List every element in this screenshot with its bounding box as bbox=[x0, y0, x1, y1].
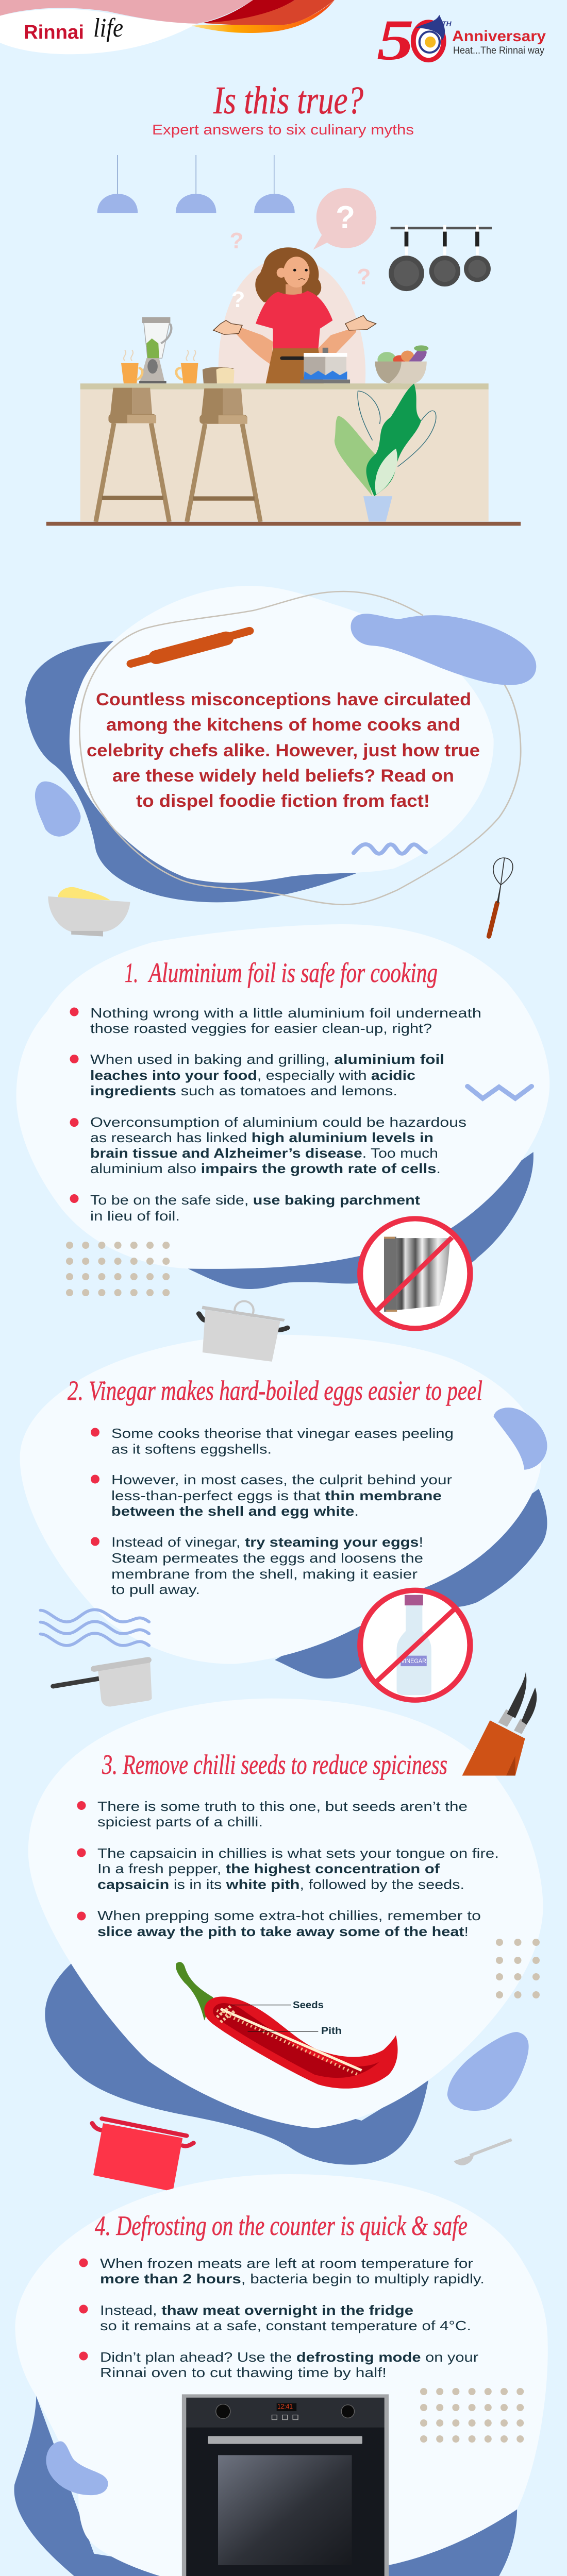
logo: Rinnai life: Rinnai bbox=[24, 22, 84, 43]
bullet 1.2: ingredients such as tomatoes and lemons. bbox=[90, 1083, 397, 1098]
bullet 2.2 bbox=[91, 1472, 452, 1519]
pan rack bbox=[389, 225, 492, 291]
logo: 50th anniversary: TH bbox=[442, 20, 452, 28]
bowl of vegetables bbox=[375, 345, 428, 383]
bullet 1.4: in lieu of foil. bbox=[90, 1208, 180, 1224]
logo: 50th anniversary: Heat...The Rinnai way bbox=[453, 45, 544, 56]
title: Is this true? bbox=[213, 79, 363, 122]
question marks: ? bbox=[336, 200, 355, 235]
oven bbox=[182, 2394, 389, 2576]
panel 4 blob shapes bbox=[14, 2174, 548, 2576]
logo: Rinnai life bbox=[24, 13, 123, 43]
bullet 2.2: between the shell and egg white . bbox=[111, 1503, 359, 1519]
bullet 2.3: Steam permeates the eggs and loosens the bbox=[111, 1550, 423, 1566]
bullet 3.2: The capsaicin in chillies is what sets your tongue on fire. bbox=[97, 1845, 499, 1861]
bread bbox=[203, 367, 235, 383]
illustration: kitchen scene bbox=[46, 155, 521, 526]
bullet 4.1: more than 2 hours , bacteria begin to multiply rapidly. bbox=[100, 2271, 485, 2286]
header wave bbox=[0, 0, 335, 54]
panel 3 blob shapes bbox=[28, 1699, 543, 2165]
mugs bbox=[121, 350, 198, 383]
bullet 1.2: leaches into your food , especially with acidic bbox=[90, 1067, 415, 1083]
chilli diagram: Pith bbox=[321, 2026, 342, 2037]
chilli diagram bbox=[176, 1962, 398, 2089]
bullet 1.3 bbox=[70, 1114, 466, 1176]
bullet 3.2: In a fresh pepper, the highest concentration of bbox=[97, 1861, 440, 1876]
bullet 4.1: When frozen meats are left at room temperature for bbox=[100, 2256, 473, 2271]
logo: 50th anniversary: Anniversary bbox=[452, 28, 546, 45]
icon: mixing bowl bbox=[48, 887, 130, 937]
icon: whisk bbox=[489, 858, 513, 937]
logo: 50th anniversary bbox=[377, 8, 546, 72]
intro text: celebrity chefs alike. However, just how true bbox=[87, 741, 480, 760]
counter and floor bbox=[46, 383, 521, 526]
bullet 4.1 bbox=[79, 2256, 485, 2286]
bullet 4.2 bbox=[79, 2302, 471, 2333]
decorative dots 4 bbox=[424, 2392, 522, 2439]
intro blob shapes bbox=[25, 586, 536, 905]
bullet 4.2: Instead, thaw meat overnight in the fridge bbox=[100, 2302, 413, 2318]
bullet 1.2: When used in baking and grilling, aluminium foil bbox=[90, 1052, 444, 1067]
bullet 1.1: Nothing wrong with a little aluminium foil underneath bbox=[90, 1005, 481, 1021]
question marks: ? bbox=[231, 287, 245, 312]
bullet 3.1: spiciest parts of a chilli. bbox=[97, 1814, 263, 1829]
decorative dots 1 bbox=[70, 1245, 168, 1293]
icon: stock pot bbox=[199, 1301, 288, 1362]
bullet 1.1 bbox=[70, 1005, 481, 1036]
question marks bbox=[230, 200, 371, 312]
bullet 2.1: Some cooks theorise that vinegar eases peeling bbox=[111, 1426, 454, 1441]
bullet 3.1: There is some truth to this one, but seeds aren’t the bbox=[97, 1799, 468, 1814]
plant bbox=[335, 383, 436, 521]
logo: 50th anniversary: 5 bbox=[377, 8, 414, 72]
icon: no vinegar bbox=[360, 1590, 470, 1700]
icon: no aluminium foil bbox=[360, 1218, 470, 1328]
bullet 2.3: Instead of vinegar, try steaming your eggs ! bbox=[111, 1534, 423, 1550]
icon: rolling pin bbox=[131, 631, 249, 664]
decorative waves 2 bbox=[41, 1609, 149, 1646]
bullet 2.2: However, in most cases, the culprit behind your bbox=[111, 1472, 452, 1487]
bullet 2.2: less-than-perfect eggs is that thin membrane bbox=[111, 1488, 442, 1503]
bullet 4.2: so it remains at a safe, constant temperature of 4°C. bbox=[100, 2318, 471, 2333]
panel: introduction bbox=[25, 586, 536, 937]
bullet 1.3: aluminium also impairs the growth rate of cells . bbox=[90, 1161, 441, 1176]
intro text bbox=[87, 690, 480, 811]
bullet 1.3: Overconsumption of aluminium could be hazardous bbox=[90, 1114, 466, 1130]
blender bbox=[139, 317, 171, 383]
panel: myth 4 defrosting bbox=[14, 2174, 548, 2576]
bullet 4.3: Didn’t plan ahead? Use the defrosting mode on your bbox=[100, 2349, 478, 2365]
bullet 2.3: to pull away. bbox=[111, 1582, 200, 1597]
icon: red pot bbox=[92, 2119, 193, 2192]
bullet 1.1: those roasted veggies for easier clean-up, right? bbox=[90, 1021, 432, 1036]
panel: myth 2 vinegar bbox=[20, 1301, 547, 1707]
speech bubble bbox=[313, 188, 376, 250]
stools bbox=[96, 388, 260, 522]
chilli diagram: Seeds bbox=[293, 2000, 324, 2011]
subtitle: Expert answers to six culinary myths bbox=[152, 122, 414, 138]
intro text: to dispel foodie fiction from fact! bbox=[136, 791, 430, 811]
intro text: Countless misconceptions have circulated bbox=[96, 690, 471, 709]
icon: saucepan bbox=[53, 1660, 152, 1707]
heading 3: 3. Remove chilli seeds to reduce spiciness bbox=[102, 1749, 447, 1780]
bullet 1.2 bbox=[70, 1052, 444, 1098]
heading 1: 1. bbox=[125, 957, 138, 988]
bullet 1.4: To be on the safe side, use baking parchment bbox=[90, 1192, 420, 1208]
bullet 3.1 bbox=[77, 1799, 468, 1829]
heading 1: Aluminium foil is safe for cooking bbox=[148, 957, 438, 988]
bullet 3.2: capsaicin is in its white pith , followed by the seeds. bbox=[97, 1876, 464, 1892]
bullet 2.3 bbox=[91, 1534, 423, 1597]
bullet 1.3: brain tissue and Alzheimer’s disease . Too much bbox=[90, 1145, 438, 1161]
bullet 1.3: as research has linked high aluminium levels in bbox=[90, 1130, 433, 1145]
icon: spoon bbox=[454, 2140, 512, 2165]
question marks: ? bbox=[357, 264, 371, 290]
intro text: among the kitchens of home cooks and bbox=[106, 715, 460, 735]
icon: no vinegar: VINEGAR bbox=[401, 1657, 426, 1665]
bullet 3.3: When prepping some extra-hot chillies, remember to bbox=[97, 1908, 481, 1923]
bullet 4.3 bbox=[79, 2349, 478, 2380]
woman bbox=[213, 247, 376, 383]
icon: knife block bbox=[462, 1672, 537, 1775]
question marks: ? bbox=[230, 228, 243, 253]
bullet 1.4 bbox=[70, 1192, 420, 1224]
panel 2 blob shapes bbox=[20, 1334, 547, 1679]
bullet 3.3: slice away the pith to take away some of the heat ! bbox=[97, 1924, 469, 1939]
bullet 2.3: membrane from the shell, making it easier bbox=[111, 1566, 418, 1582]
decorative dots 3 bbox=[499, 1942, 539, 1995]
panel: myth 1 aluminium foil bbox=[16, 924, 549, 1328]
bullet 2.1 bbox=[91, 1426, 454, 1457]
oven: 12:41 bbox=[277, 2402, 293, 2410]
panel: myth 3 chilli bbox=[28, 1672, 543, 2192]
pendant lamps bbox=[97, 155, 295, 213]
bullet 3.2 bbox=[77, 1845, 499, 1892]
bullet 3.3 bbox=[77, 1908, 481, 1939]
bullet 2.1: as it softens eggshells. bbox=[111, 1442, 272, 1457]
logo: Rinnai life: life bbox=[93, 13, 123, 43]
cooking pot on stove bbox=[282, 348, 350, 383]
intro text: are these widely held beliefs? Read on bbox=[112, 766, 454, 786]
panel 1 blob shapes bbox=[16, 924, 549, 1289]
bullet 4.3: Rinnai oven to cut thawing time by half! bbox=[100, 2365, 387, 2380]
